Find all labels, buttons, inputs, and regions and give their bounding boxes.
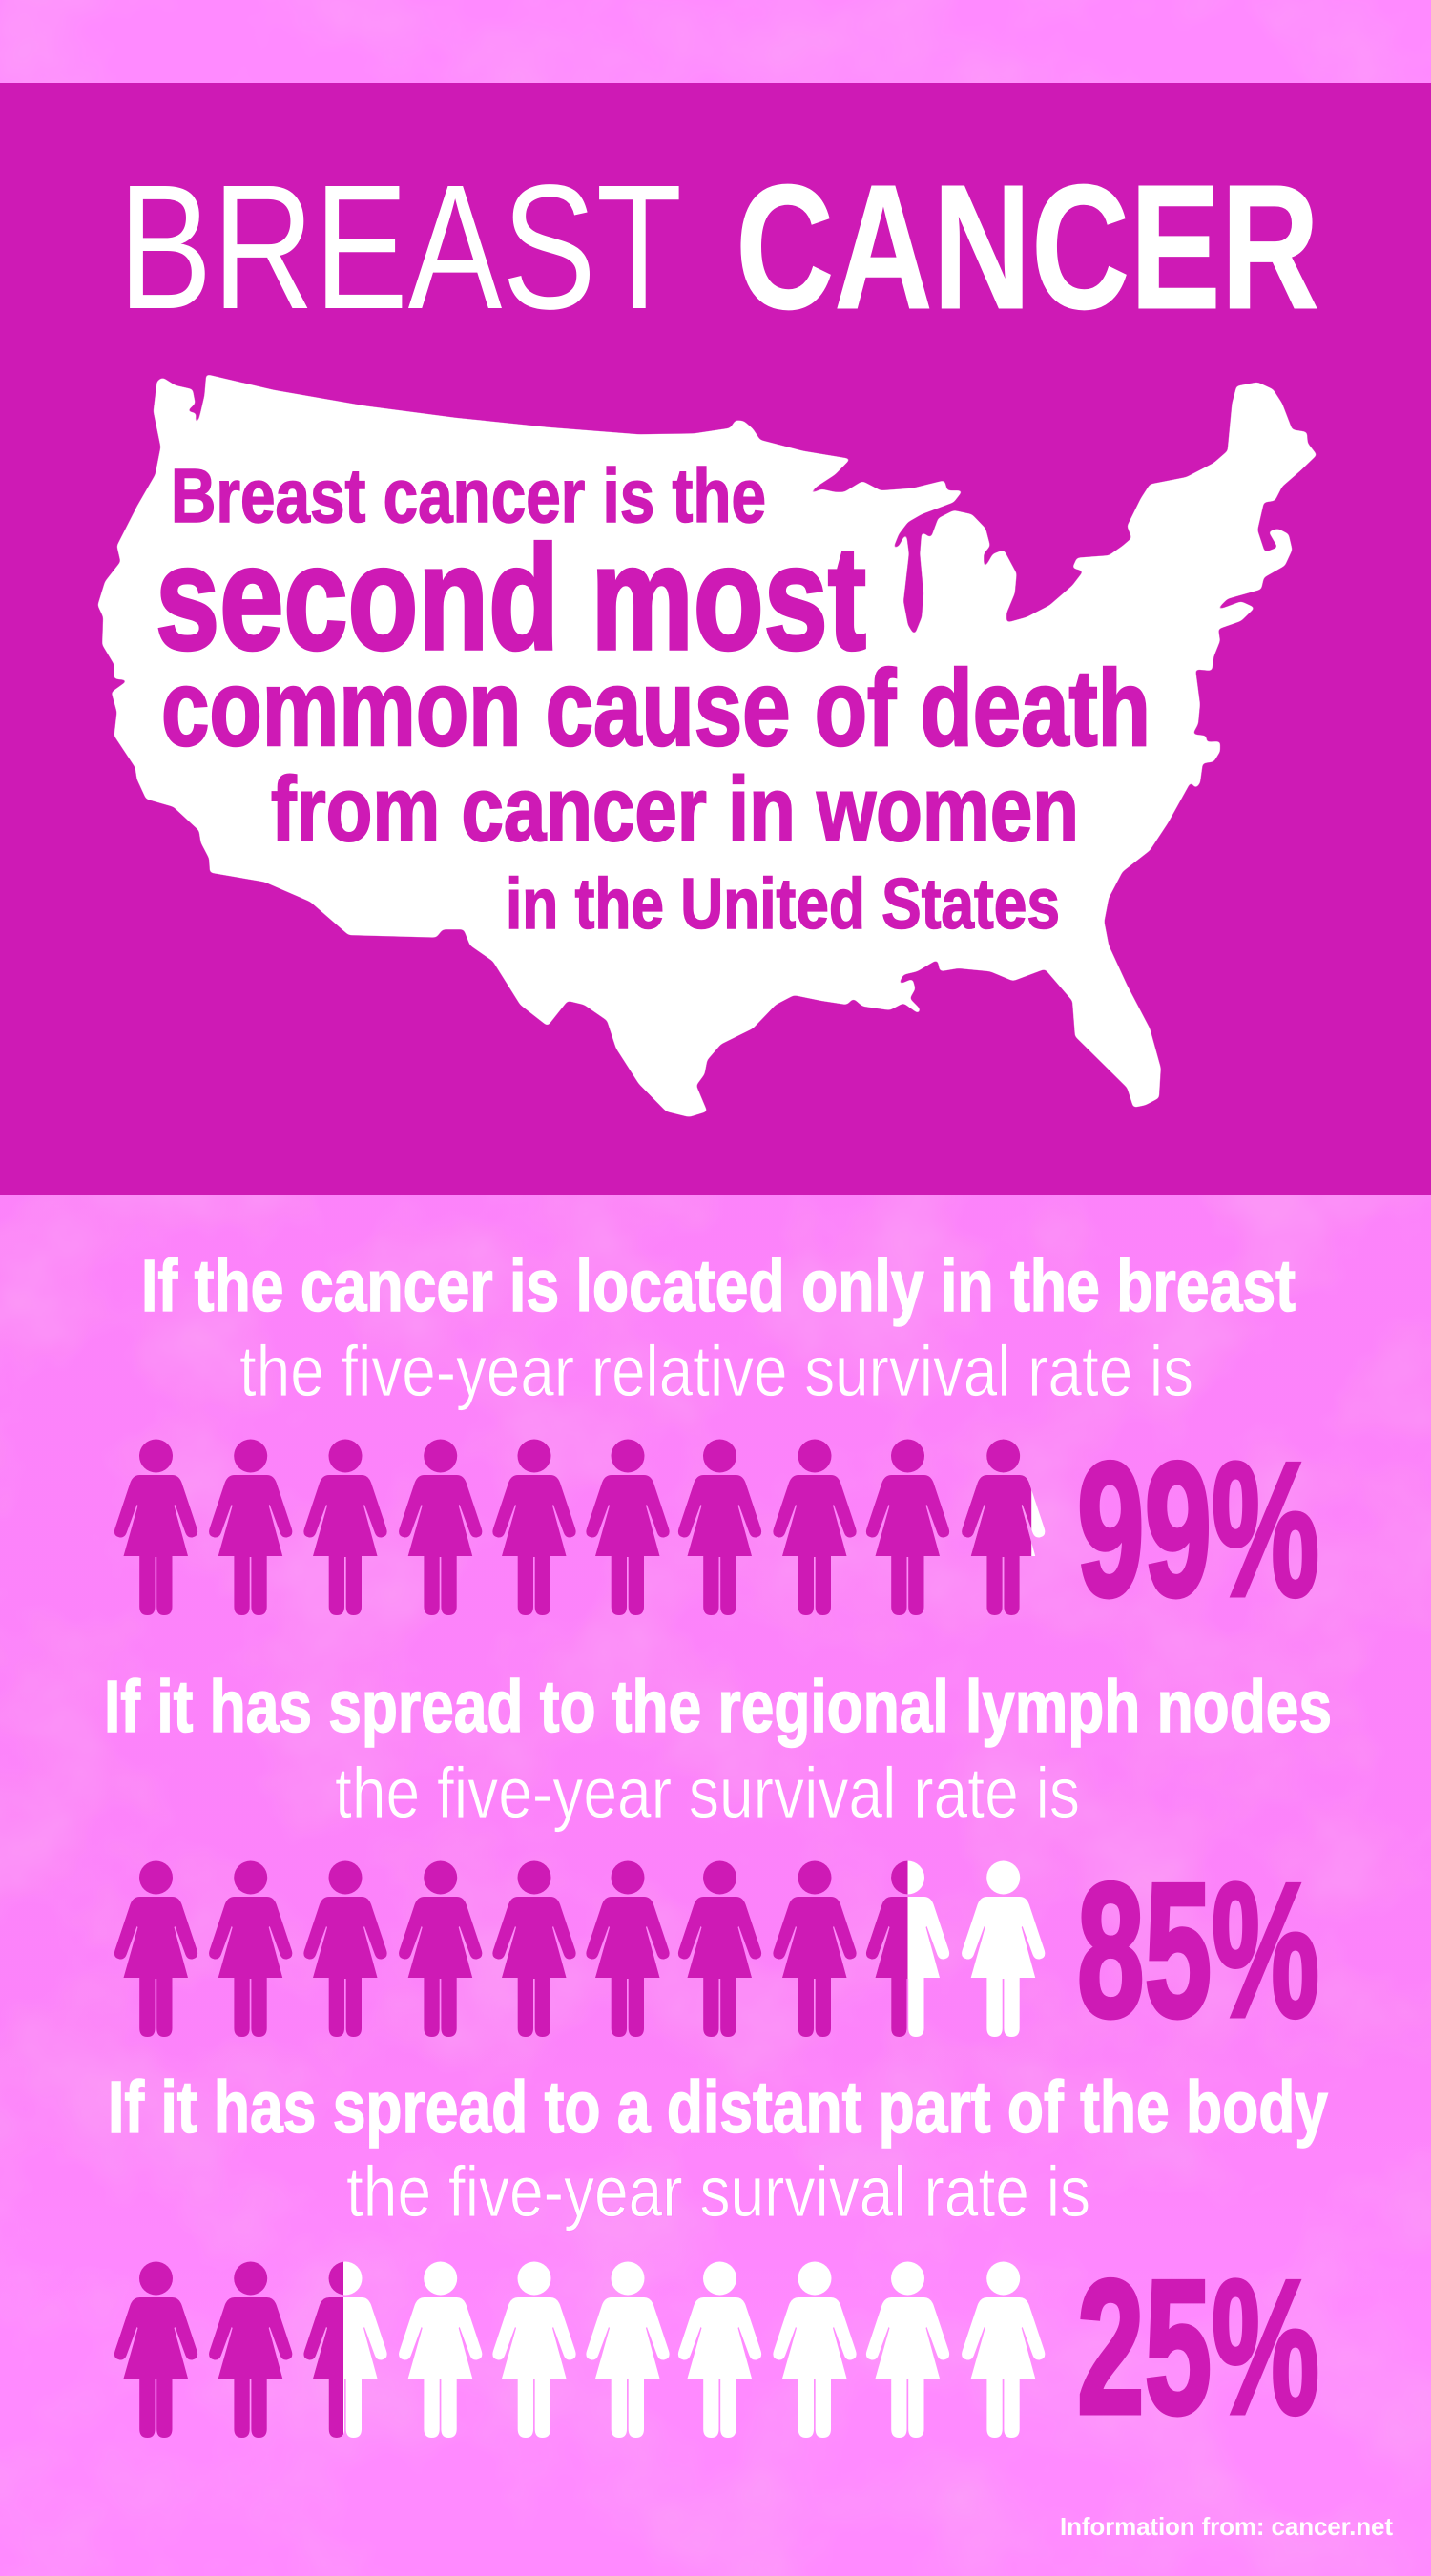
pictogram: 25 percent — [114, 2261, 1045, 2438]
map of the United States — [97, 374, 1317, 1117]
map text: second most common cause: Breast cancer is the — [171, 453, 766, 538]
subheading: survival: the five-year survival rate is — [335, 1753, 1080, 1833]
map text: second most common cause: second most — [156, 515, 866, 680]
section: regional lymph nodes — [104, 1666, 1332, 2057]
pictogram: 85 percent — [114, 1860, 1045, 2037]
map text: second most common cause: in the United States — [506, 863, 1060, 944]
panel: purple title band — [0, 83, 1431, 1195]
title — [118, 149, 1319, 346]
section: located only in the breast — [114, 1245, 1319, 1636]
subheading: relative survival: the five-year relative survival rate is — [239, 1331, 1193, 1411]
map text: second most common cause: from cancer in women — [271, 758, 1079, 861]
map text: second most common cause: common cause of death — [161, 648, 1151, 768]
pictogram: 99 percent — [114, 1439, 1045, 1615]
title: BREAST — [118, 149, 682, 346]
subheading: survival rate: the five-year survival rate is — [346, 2151, 1090, 2232]
source credit: Information from: cancer.net — [1060, 2512, 1393, 2541]
section: distant part of the body — [108, 2067, 1328, 2454]
map text: second most common cause — [156, 453, 1151, 944]
